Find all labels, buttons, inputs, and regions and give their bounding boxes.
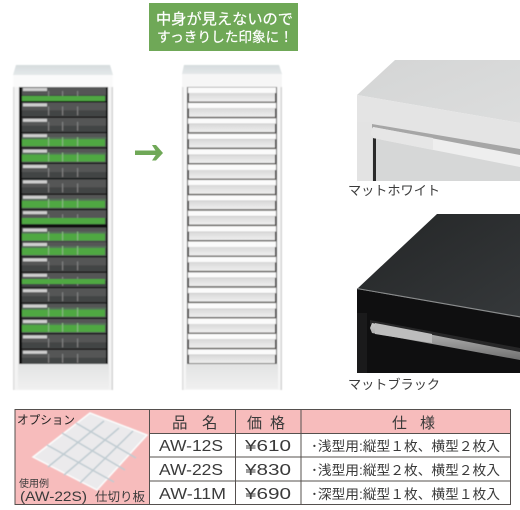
drawers with green and grey contents xyxy=(22,87,106,364)
row: AW-12S: AW-12S xyxy=(159,438,223,455)
row: AW-11M xyxy=(159,486,500,503)
icon: divider tray xyxy=(33,413,147,490)
callout banner xyxy=(149,3,298,51)
row: AW-11M: ¥690 xyxy=(244,486,291,503)
table header: 名 xyxy=(202,414,218,432)
table header: 格 xyxy=(270,415,285,432)
row: AW-22S xyxy=(159,462,500,479)
arrow xyxy=(135,145,163,160)
row: AW-22S: ¥830 xyxy=(244,462,291,479)
row: AW-12S: ･浅型用:縦型１枚、横型２枚入 xyxy=(311,439,500,454)
table header: 品 xyxy=(172,415,188,432)
option panel with tray: (AW-22S) xyxy=(20,488,87,504)
label: matte white: マットホワイト xyxy=(348,183,440,198)
row: AW-11M: ･深型用:縦型１枚、横型１枚入 xyxy=(311,487,500,502)
callout banner: すっきりした印象に！ xyxy=(157,29,293,45)
option panel with tray: 使用例 xyxy=(19,477,49,490)
table header: 様 xyxy=(420,415,435,432)
option panel with tray: オプション xyxy=(17,413,75,427)
row: AW-12S xyxy=(159,438,500,455)
cabinet with opaque drawers xyxy=(182,65,282,390)
label: matte black: マットブラック xyxy=(348,377,440,392)
option panel with tray: 仕切り板 xyxy=(95,490,145,504)
close-up: matte white xyxy=(357,60,520,181)
table header xyxy=(149,410,510,433)
cabinet with visible contents xyxy=(13,65,113,390)
callout banner: 中身が見えないので xyxy=(156,11,293,28)
close-up: matte black xyxy=(357,214,520,373)
option panel with tray xyxy=(15,410,149,504)
row: AW-22S: ･浅型用:縦型２枚、横型２枚入 xyxy=(311,463,500,478)
row: AW-12S: ¥610 xyxy=(244,438,291,455)
table header: 仕 xyxy=(392,415,407,432)
table header: 価 xyxy=(247,415,262,432)
white drawer fronts xyxy=(188,88,276,365)
row: AW-11M: AW-11M xyxy=(159,486,226,503)
panel: option table xyxy=(15,410,510,504)
row: AW-22S: AW-22S xyxy=(159,462,223,479)
